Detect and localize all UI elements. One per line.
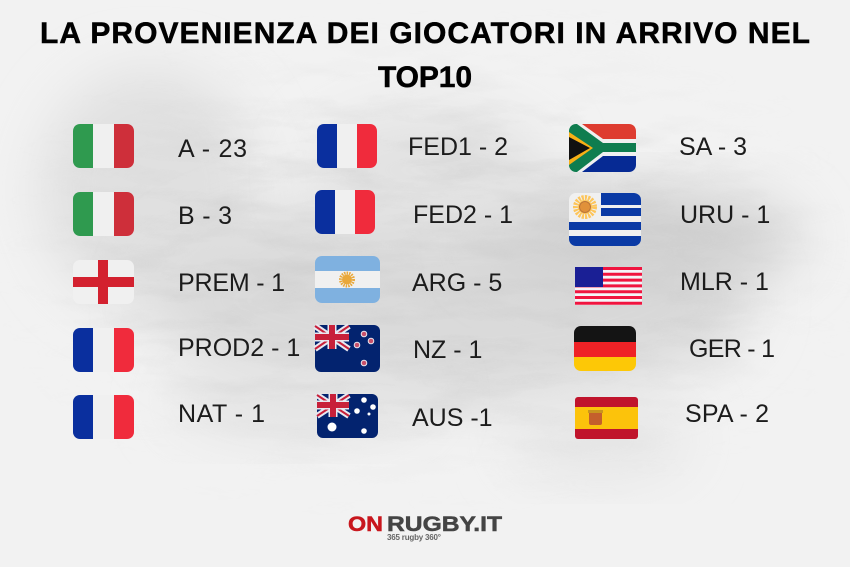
label: GER - 1: GER - 1 (689, 335, 775, 363)
label: SPA - 2: SPA - 2 (685, 400, 769, 428)
flag: Germany (GER) (574, 326, 636, 371)
label: FED2 - 1: FED2 - 1 (413, 201, 513, 229)
flag: France (FED2) (315, 190, 375, 234)
title: LA PROVENIENZA DEI GIOCATORI IN ARRIVO NEL (40, 17, 810, 50)
label: PREM - 1: PREM - 1 (178, 269, 285, 297)
logo: OnRugby.it: 365 rugby 360° (387, 533, 441, 542)
background texture (41, 74, 808, 462)
flag: South Africa (SA) (569, 124, 636, 172)
column 1 (73, 124, 300, 439)
logo: OnRugby.it (348, 513, 502, 542)
logo: OnRugby.it: ON (348, 513, 383, 536)
flag: USA (MLR) (575, 267, 642, 305)
flag: France (NAT) (73, 395, 134, 439)
title: TOP10 (378, 61, 472, 94)
label: URU - 1: URU - 1 (680, 201, 770, 229)
label: NZ - 1: NZ - 1 (413, 336, 482, 364)
flag: Argentina (ARG) (315, 256, 380, 303)
label: MLR - 1: MLR - 1 (680, 268, 769, 296)
flag: France (FED1) (317, 124, 377, 168)
title (40, 17, 810, 94)
flag: New Zealand (NZ) (315, 325, 380, 372)
flag: Uruguay (URU) (569, 193, 641, 246)
flag: France (PROD2) (73, 328, 134, 372)
column 2 (315, 124, 513, 438)
flag: Australia (AUS) (317, 394, 378, 438)
flag: Italy (A) (73, 124, 134, 168)
label: A - 23: A - 23 (178, 135, 247, 163)
flag: Spain (SPA) (575, 397, 638, 439)
label: FED1 - 2: FED1 - 2 (408, 133, 508, 161)
flag: Italy (B) (73, 192, 134, 236)
label: AUS -1: AUS -1 (412, 404, 493, 432)
flag: England (PREM) (73, 260, 134, 304)
label: PROD2 - 1: PROD2 - 1 (178, 334, 300, 362)
label: SA - 3: SA - 3 (679, 133, 747, 161)
label: NAT - 1: NAT - 1 (178, 400, 265, 428)
column 3 (569, 124, 775, 439)
label: ARG - 5: ARG - 5 (412, 269, 502, 297)
logo: OnRugby.it: RUGBY.IT (387, 513, 502, 536)
label: B - 3: B - 3 (178, 202, 232, 230)
